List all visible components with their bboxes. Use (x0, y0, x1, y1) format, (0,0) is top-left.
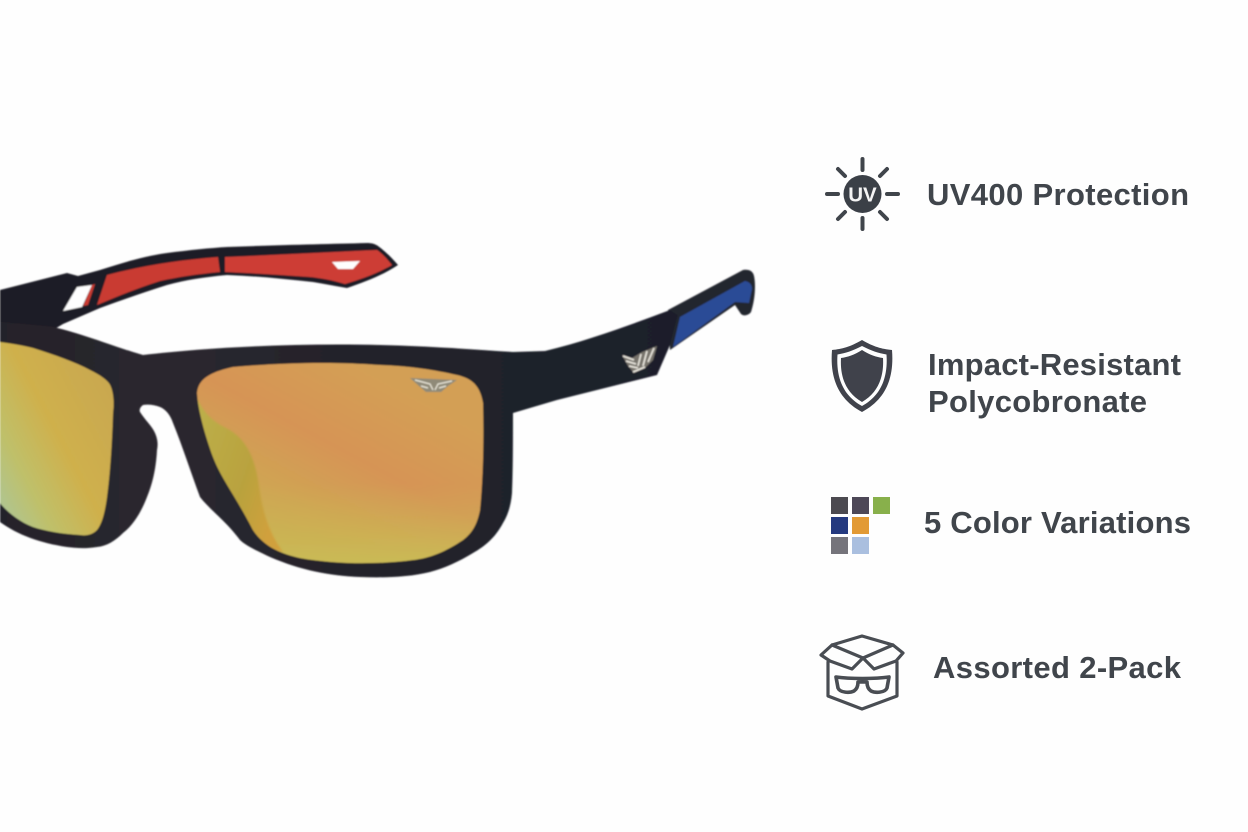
lens bottom glow (279, 506, 480, 564)
icon: UV sun (827, 159, 898, 229)
lens reflection swoosh (195, 398, 283, 552)
label: Assorted 2-Pack: Assorted 2-Pack (933, 650, 1182, 685)
feature: assorted 2-pack (821, 636, 1182, 709)
label: 5 Color Variations: 5 Color Variations (924, 505, 1191, 540)
temple cut-out holes (332, 261, 360, 269)
feature: impact resistant (832, 340, 1186, 419)
sunglasses photo (0, 243, 755, 577)
label: Impact-Resistant Polycobronate: Impact-Resistant (928, 347, 1181, 382)
temple hinge logo (622, 346, 657, 373)
front frame (0, 310, 678, 577)
label: UV400 Protection: UV400 Protection (927, 177, 1189, 212)
near temple arm with blue grip (668, 270, 755, 350)
right lens (197, 363, 483, 563)
icon: box with glasses (821, 636, 903, 709)
icon: UV sun: UV (848, 184, 877, 206)
icon: color swatches (831, 497, 890, 554)
lens logo (410, 378, 457, 392)
feature: UV400 protection (827, 159, 1189, 229)
far temple arm with red grip (0, 243, 398, 330)
icon: shield (832, 340, 892, 412)
feature: color variations (831, 497, 1191, 554)
left lens (0, 342, 114, 535)
label: Impact-Resistant Polycobronate: Polycobronate (928, 384, 1147, 419)
